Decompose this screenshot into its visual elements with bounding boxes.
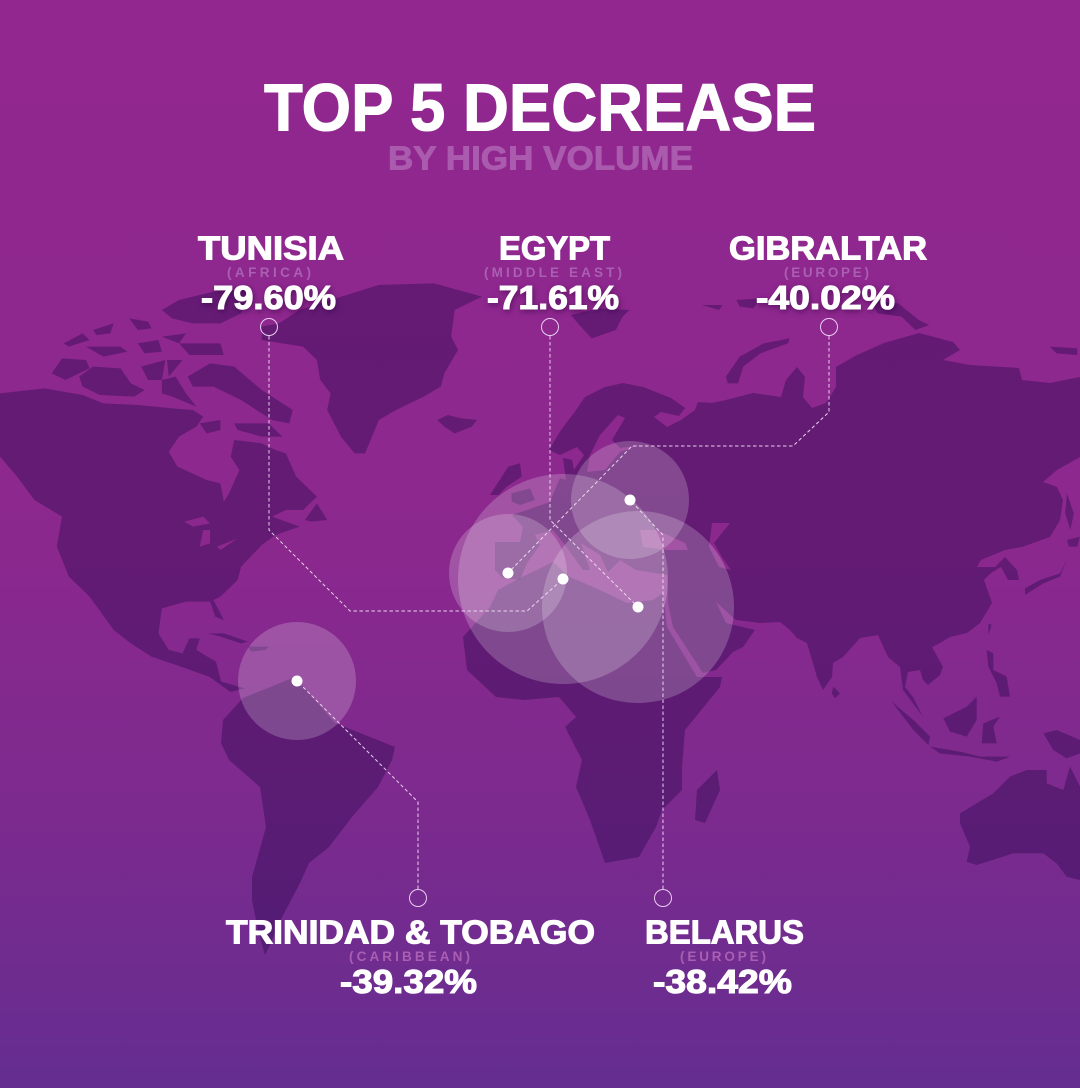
connector: Tunisia xyxy=(260,318,568,611)
label: Gibraltar: GIBRALTAR xyxy=(729,230,927,266)
label: Trinidad & Tobago: (CARIBBEAN) xyxy=(349,949,470,964)
connector: Belarus xyxy=(624,494,672,906)
bubble: Trinidad & Tobago xyxy=(238,622,356,740)
label: Belarus xyxy=(645,914,804,1000)
bubble: Egypt xyxy=(542,511,734,703)
label: Tunisia xyxy=(198,230,344,316)
subtitle: BY HIGH VOLUME xyxy=(388,140,693,176)
label: Tunisia: -79.60% xyxy=(201,279,336,316)
connector: Gibraltar xyxy=(502,318,838,578)
label: Egypt: EGYPT xyxy=(499,230,610,266)
bubbles xyxy=(238,441,734,740)
map: Russian Arctic islands and Japan xyxy=(571,298,1080,547)
bubble: Gibraltar xyxy=(449,514,567,632)
map: British Isles xyxy=(490,463,535,505)
connector: Egypt xyxy=(542,318,644,612)
label: Trinidad & Tobago xyxy=(226,914,595,1000)
connector: Trinidad & Tobago xyxy=(292,676,426,906)
label: Belarus: (EUROPE) xyxy=(680,949,766,964)
map: Africa xyxy=(463,562,722,863)
label: Belarus: BELARUS xyxy=(645,914,804,950)
bubble: Belarus xyxy=(571,441,689,559)
label: Gibraltar xyxy=(729,230,927,316)
label: Gibraltar: -40.02% xyxy=(756,279,895,316)
world map xyxy=(0,283,1080,955)
label: Belarus: -38.42% xyxy=(653,963,792,1000)
map: North America, Greenland and Arctic islands xyxy=(0,283,482,692)
map: Eurasia xyxy=(495,333,1080,717)
label: Egypt: -71.61% xyxy=(487,279,619,316)
label: Trinidad & Tobago: TRINIDAD & TOBAGO xyxy=(226,914,595,950)
title: TOP 5 DECREASE xyxy=(264,70,816,146)
label: Trinidad & Tobago: -39.32% xyxy=(340,963,477,1000)
label: Tunisia: (AFRICA) xyxy=(227,265,311,280)
map: South America xyxy=(221,677,395,955)
map: Madagascar xyxy=(695,770,720,823)
label: Tunisia: TUNISIA xyxy=(198,230,344,266)
label: Egypt: (MIDDLE EAST) xyxy=(484,265,622,280)
bubble: Tunisia xyxy=(458,474,668,684)
label: Egypt xyxy=(484,230,622,316)
label: Gibraltar: (EUROPE) xyxy=(784,265,869,280)
map: Southeast Asia and Australia xyxy=(832,560,1080,880)
